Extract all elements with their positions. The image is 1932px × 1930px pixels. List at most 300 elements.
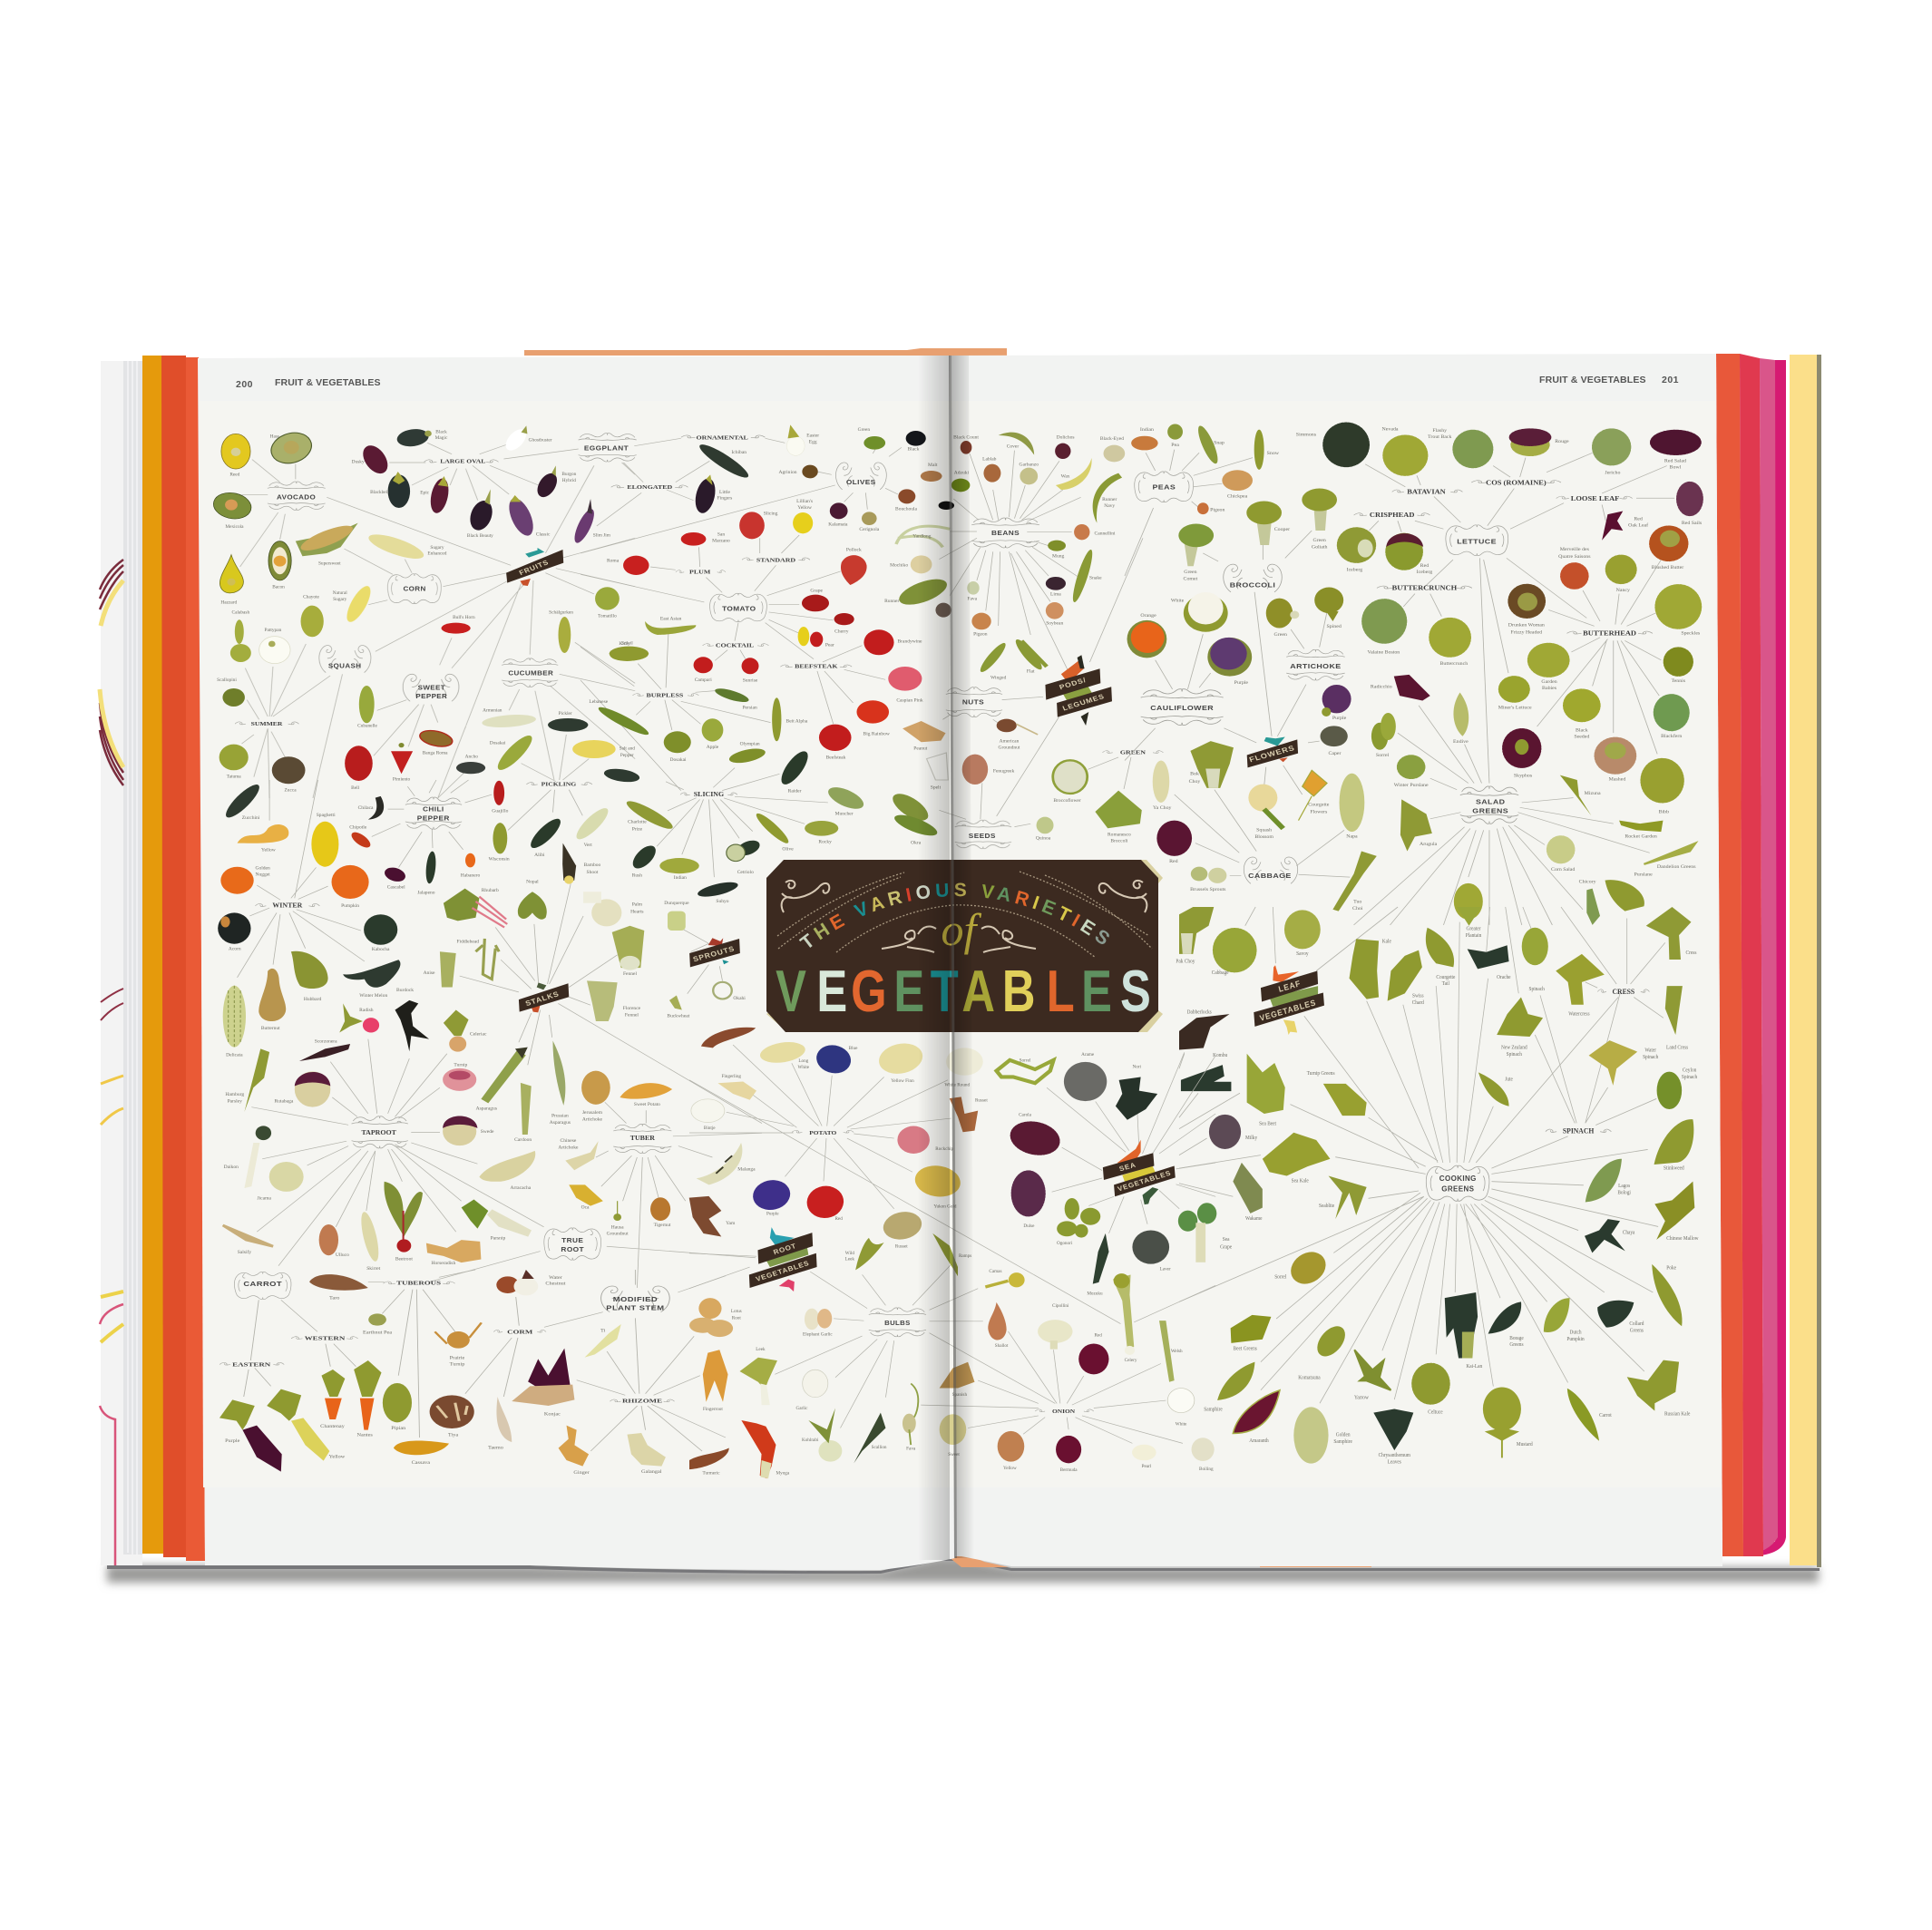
icon: Pimiento pepper: Pimiento — [393, 778, 411, 782]
icon: San Marzano tomato — [681, 532, 730, 546]
icon: Pigeon bean — [971, 613, 991, 637]
icon: Cetriolo cucumber — [727, 837, 762, 875]
icon: Lagos Bologi: Lagos — [1618, 1184, 1630, 1189]
hub: Western: WESTERN — [305, 1335, 346, 1341]
icon: Nantes carrot — [354, 1360, 382, 1438]
banner: Pods and Legumes — [1045, 655, 1112, 726]
icon: Golden Samphire: Samphire — [1333, 1439, 1352, 1445]
icon: Chantenay carrot: Chantenay — [320, 1425, 345, 1429]
icon: Malabar Spinach: Stinkweed — [1664, 1165, 1684, 1171]
icon: Prairie Turnip: Prairie — [450, 1356, 465, 1360]
icon: Napa cabbage — [1340, 774, 1364, 839]
icon: Land Cress — [1665, 986, 1688, 1051]
icon: Jicama — [257, 1162, 304, 1201]
icon: Taro: Taro — [329, 1296, 340, 1301]
icon: Fingerling potato: Fingerling — [721, 1075, 742, 1079]
hub: Taproot — [352, 1116, 408, 1148]
icon: Snap pea — [1195, 424, 1225, 465]
icon: Delicata squash — [223, 986, 246, 1058]
hub: Crisphead: CRISPHEAD — [1370, 512, 1415, 519]
hub: Nuts: NUTS — [962, 698, 984, 706]
icon: Sweet onion: Sweet — [948, 1453, 961, 1457]
icon: Lotus Root: Lotus — [731, 1310, 742, 1314]
icon: Buckwheat sprouts — [667, 995, 690, 1019]
chart region: top center, eggplant, olives, tomato, beans — [579, 424, 1164, 852]
icon: Russian Kale — [1627, 1360, 1691, 1418]
icon: Campari tomato: Campari — [695, 677, 712, 683]
icon: Tennis Ball lettuce — [1664, 648, 1692, 684]
hub: Plum — [676, 568, 726, 575]
icon: Ghost eggplant — [502, 425, 552, 453]
icon: Classic eggplant — [504, 495, 551, 539]
icon: Pear tomato: Pear — [825, 643, 834, 648]
icon: Bamboo Shoot: Bamboo — [584, 863, 601, 868]
icon: Cabbage: Cabbage — [1212, 970, 1229, 976]
icon: Chinese Artichoke: Artichoke — [558, 1145, 579, 1150]
hub: Loose leaf: LOOSE LEAF — [1571, 494, 1620, 502]
icon: Spinach leaf: Spinach — [1529, 987, 1545, 992]
icon: Cover green bean — [999, 433, 1034, 455]
icon: Swede — [443, 1116, 494, 1145]
icon: Mustard greens — [1483, 1387, 1533, 1457]
banner: Sprouts — [689, 938, 740, 967]
connector lines — [240, 443, 635, 798]
icon: Scallopini squash — [217, 678, 245, 707]
hub: Cocktail — [702, 641, 769, 648]
icon: Dabberlocks — [1179, 1010, 1229, 1050]
icon: Kale — [1350, 939, 1391, 999]
icon: Greater Plantain: Greater — [1467, 927, 1481, 932]
icon: Tatuma squash — [220, 745, 249, 779]
icon: Cooper broccoli — [1246, 501, 1290, 545]
icon: Greater Plantain — [1457, 907, 1481, 939]
icon: Big Rainbow tomato — [856, 700, 890, 736]
icon: Garbanzo bean: Garbanzo — [1020, 463, 1039, 467]
icon: Cardoon — [514, 1083, 532, 1143]
icon: Bok Choy: Bok — [1190, 772, 1199, 776]
icon: Yarrow — [1354, 1350, 1390, 1400]
hub: Cauliflower: CAULIFLOWER — [1150, 705, 1214, 712]
title word: of: of — [942, 904, 982, 955]
icon: Long White potato — [758, 1039, 810, 1070]
hub: True root: ROOT — [561, 1245, 584, 1253]
icon: Salsify — [223, 1225, 273, 1255]
icon: Purslane: Purslane — [1634, 872, 1653, 877]
icon: Tiger Nut — [650, 1197, 671, 1228]
icon: Sweet Potato — [620, 1083, 672, 1107]
icon: Spined artichoke: Spined — [1326, 624, 1342, 629]
icon: Celtuce — [1413, 1364, 1449, 1416]
icon: Hausa Groundnut — [607, 1201, 629, 1237]
icon: Borage Greens: Greens — [1509, 1342, 1524, 1348]
icon: Dabberlocks: Dabberlocks — [1187, 1010, 1212, 1016]
icon: Lillian's Yellow tomato: Yellow — [797, 505, 812, 511]
icon: Spelt seeds — [927, 753, 948, 790]
icon: Water Chestnut: Water — [549, 1276, 562, 1281]
icon: Nevada lettuce — [1382, 427, 1427, 475]
icon: Pea — [1167, 424, 1183, 448]
icon: Long White potato: Long — [798, 1059, 809, 1064]
icon: Lima bean: Lima — [1050, 592, 1062, 597]
page header, right: 201 — [1662, 375, 1679, 385]
icon: Red Iceberg lettuce: Red — [1420, 563, 1429, 569]
icon: Boston cucumber, slicing — [629, 842, 660, 878]
icon: Iceberg lettuce: Iceberg — [1347, 568, 1362, 572]
icon: Brandywine tomato — [864, 629, 922, 655]
icon: Green cauliflower: Broccoflower — [1053, 797, 1081, 804]
icon: Ghost eggplant: Ghostbuster — [529, 439, 552, 444]
icon: Acorn squash — [218, 912, 251, 951]
icon: Squash Blossom — [1248, 785, 1283, 840]
icon: Garbanzo bean — [1020, 463, 1039, 484]
hub: Green cauliflower — [1102, 748, 1164, 755]
right fore-edge colour bands — [1716, 354, 1821, 1567]
icon: Peanut — [903, 721, 946, 751]
icon: Chayote: Chayote — [303, 596, 320, 599]
icon: Bell pepper: Bell — [351, 786, 360, 791]
icon: Lillian's Yellow tomato — [793, 499, 813, 533]
hub: Slicing: SLICING — [694, 790, 724, 798]
inside cover with page block, left — [100, 361, 142, 1565]
icon: Banga Roma pepper — [418, 727, 454, 755]
icon: Yam — [689, 1196, 736, 1237]
hub: Standard: STANDARD — [756, 556, 795, 563]
icon: Welsh onion — [1159, 1321, 1183, 1382]
icon: Charlotte Prize cucumber: Prize — [632, 827, 643, 832]
icon: Sugary Enhanced corn: Enhanced — [427, 552, 447, 556]
hub: Summer: SUMMER — [251, 720, 283, 727]
icon: Blushed Butter lettuce: Blushed Butter — [1652, 565, 1683, 570]
icon: Rockchip potato: Rockchip — [935, 1147, 954, 1152]
icon: Red potato — [802, 1181, 849, 1223]
icon: Beetroot — [384, 1182, 423, 1262]
banner: Leaf Vegetables — [1254, 965, 1324, 1035]
icon: Classic eggplant: Classic — [536, 533, 551, 538]
icon: Lotus Root — [689, 1298, 742, 1337]
icon: Cress — [1646, 907, 1696, 960]
icon: Pear tomato — [798, 627, 834, 648]
icon: Green olive — [858, 427, 885, 450]
icon: Banga Roma pepper: Banga Roma — [423, 752, 448, 755]
icon: Red onion — [1078, 1334, 1108, 1374]
icon: Bull's Horn pepper: Bull's Horn — [453, 616, 475, 620]
icon: Armenian cucumber: Armenian — [483, 709, 503, 713]
icon: Red Oak Leaf lettuce: Oak Leaf — [1628, 522, 1648, 529]
icon: Ramps bulb: Ramps — [959, 1254, 971, 1259]
icon: Yellow carrot — [267, 1389, 345, 1461]
icon: Hamburg Parsley — [225, 1048, 269, 1112]
icon: Elephant Garlic — [803, 1309, 833, 1338]
icon: Red potato: Red — [834, 1217, 843, 1222]
icon: Mashed lettuce — [1595, 738, 1635, 782]
title word: Vegetables: S — [1120, 959, 1151, 1024]
hub: Bulbs — [869, 1308, 926, 1337]
icon: Russet potato: Russet — [895, 1245, 908, 1249]
icon: Fingerling potato — [717, 1075, 756, 1100]
icon: Spanish onion cluster — [940, 1362, 974, 1398]
icon: Rocket Garden: Rocket Garden — [1625, 834, 1657, 839]
icon: Runner bean: Runner — [884, 599, 900, 604]
icon: Nicoise olive: Malt — [928, 463, 938, 468]
icon: Nantes carrot: Nantes — [357, 1433, 373, 1438]
icon: Boston cucumber: Dosakai — [490, 742, 506, 746]
icon: Slim Jim eggplant — [571, 499, 610, 545]
icon: Milky seaweed — [1209, 1115, 1257, 1149]
icon: Bibb lettuce: Bibb — [1659, 810, 1669, 814]
icon: Celtuce: Celtuce — [1428, 1409, 1443, 1416]
icon: Natural Sugary corn: Sugary — [333, 598, 347, 602]
icon: Mozuku — [1087, 1233, 1108, 1296]
icon: Burdock — [395, 988, 429, 1051]
icon: Chaya — [1585, 1219, 1635, 1253]
icon: Swiss Chard: Chard — [1412, 1000, 1424, 1006]
left page — [198, 356, 955, 1570]
icon: Boiling onion: Boiling — [1199, 1467, 1214, 1472]
icon: Winged bean: Winged — [990, 676, 1007, 680]
hub: Olives: OLIVES — [846, 479, 876, 486]
icon: Squash Blossom: Blossom — [1254, 835, 1274, 840]
icon: Orange cauliflower: Orange — [1140, 613, 1156, 619]
icon: Golden Nugget squash: Nugget — [255, 872, 270, 878]
icon: Laver — [1132, 1230, 1171, 1272]
icon: Cassava — [394, 1441, 449, 1466]
icon: Sea Beet: Sea Beet — [1259, 1121, 1276, 1127]
hub: Chili pepper — [405, 797, 462, 829]
icon: Bermuda onion — [1056, 1436, 1081, 1473]
icon: Golden Samphire: Golden — [1336, 1433, 1351, 1438]
icon: Wild Leek — [845, 1238, 884, 1270]
icon: Cipollini: Cipollini — [1052, 1304, 1069, 1309]
icon: Vert cucumber — [572, 804, 612, 848]
icon: Sorrel — [1371, 713, 1396, 758]
icon: Wakame: Wakame — [1245, 1216, 1263, 1222]
icon: Bok Choy — [1189, 741, 1234, 788]
page header, left: 200 — [236, 379, 253, 390]
icon: Dolichos bean — [1055, 435, 1075, 459]
icon: Rutabaga — [274, 1071, 330, 1107]
icon: Bintje potato — [691, 1099, 725, 1131]
icon: Myoga — [741, 1420, 790, 1478]
icon: Chinese Artichoke: Chinese — [561, 1138, 577, 1144]
icon: Chicory — [1579, 880, 1600, 925]
icon: Winter Purslane: Winter Purslane — [1394, 783, 1429, 788]
icon: Pimiento pepper — [391, 743, 413, 782]
icon: Bacon avocado — [268, 541, 291, 590]
icon: Galangal: Galangal — [641, 1470, 662, 1475]
connector lines — [238, 780, 762, 1288]
icon: Quinoa — [1036, 817, 1054, 841]
hub: Squash — [319, 646, 371, 673]
icon: Scorzonera: Scorzonera — [315, 1038, 337, 1044]
banner: Root Vegetables: VEGETABLES — [755, 1259, 811, 1283]
icon: Flambe lettuce: Drunken Woman — [1508, 623, 1545, 629]
hub: Tomato: TOMATO — [722, 605, 756, 612]
hub: Ornamental — [681, 434, 766, 441]
connector lines — [689, 1045, 1215, 1443]
icon: Romanesco — [1095, 791, 1142, 843]
icon: Nancy lettuce — [1606, 556, 1635, 593]
icon: Laver: Laver — [1160, 1268, 1171, 1272]
hub: Eggplant — [579, 434, 637, 462]
icon: Hausa Groundnut: Hausa — [611, 1225, 624, 1230]
icon: San Marzano tomato: Marzano — [712, 539, 730, 543]
icon: Galangal — [627, 1433, 666, 1475]
icon: Okra: Okra — [911, 841, 922, 845]
icon: Rocket Garden — [1619, 821, 1663, 839]
icon: Turmeric — [689, 1448, 729, 1476]
icon: Fenugreek seeds: Fenugreek — [993, 769, 1015, 774]
icon: Tiya corm: Tiya — [448, 1433, 459, 1438]
hub: Loose leaf — [1556, 494, 1633, 502]
icon: Mung bean — [1048, 541, 1066, 559]
hub: Spinach — [1546, 1126, 1611, 1136]
hub: Salad greens: GREENS — [1472, 807, 1508, 814]
icon: Garlic — [795, 1370, 828, 1411]
icon: White cauliflower: White — [1171, 599, 1185, 603]
icon: Simmons lettuce — [1296, 424, 1369, 466]
hub: Beefsteak — [780, 662, 852, 669]
icon: Chrysanthemum Leaves: Leaves — [1388, 1459, 1401, 1466]
icon: Green artichoke — [1266, 599, 1299, 638]
icon: Arame: Arame — [1081, 1053, 1095, 1058]
icon: Dunquerque sprouts — [664, 901, 689, 931]
chart paper background — [200, 401, 1721, 1487]
icon: New Zealand Spinach: Spinach — [1507, 1052, 1522, 1058]
hub: Cos (Romaine): COS (ROMAINE) — [1486, 479, 1547, 486]
icon: Tennis Ball lettuce: Tennis — [1672, 678, 1685, 684]
icon: Cubanelle pepper: Cubanelle — [357, 725, 378, 728]
icon: Salsify: Salsify — [238, 1249, 251, 1255]
icon: Fava bean — [967, 581, 980, 601]
icon: Natural Sugary corn — [333, 583, 376, 625]
icon: Daikon: Daikon — [224, 1165, 239, 1170]
icon: Runner Navy bean — [1093, 473, 1122, 523]
banner: Stalks: STALKS — [524, 990, 561, 1008]
icon: Cipollini — [1038, 1304, 1073, 1350]
icon: White onion — [1167, 1389, 1195, 1427]
icon: Raider cucumber — [776, 748, 813, 794]
icon: Poke — [1652, 1264, 1682, 1326]
icon: Kabocha squash — [364, 914, 397, 952]
icon: Sorrel — [1274, 1246, 1331, 1290]
icon: Green cauliflower — [1053, 760, 1088, 804]
icon: Purple carrot — [220, 1399, 282, 1472]
icon: Buckwheat sprouts: Buckwheat — [667, 1014, 690, 1019]
icon: Scallion: Scallion — [872, 1446, 887, 1450]
icon: Cranberry bean — [935, 603, 951, 618]
hub: Spinach: SPINACH — [1563, 1126, 1595, 1136]
hub: Cucumber — [502, 658, 558, 687]
icon: Natural Sugary corn: Natural — [333, 591, 347, 596]
icon: Mexicola avocado: Mexicola — [225, 525, 244, 530]
icon: Alfalfa sprouts: Okahi — [733, 996, 746, 1001]
icon: Sorrel, leaf — [1454, 883, 1483, 920]
banner: Sea Vegetables: SEA — [1118, 1161, 1137, 1173]
icon: American Groundnut: Groundnut — [999, 746, 1020, 750]
hub: Potato: POTATO — [809, 1129, 837, 1136]
hub: Chili pepper: PEPPER — [417, 814, 450, 822]
icon: Slim Jim eggplant: Slim Jim — [593, 534, 610, 539]
hub: Butterhead — [1566, 629, 1653, 637]
icon: Alibi cucumber: Alibi — [534, 853, 545, 858]
icon: Fava onion sprout: Fava — [906, 1448, 916, 1451]
icon: Kale: Kale — [1382, 939, 1391, 944]
icon: Tuo Choi — [1332, 852, 1377, 911]
icon: Anise — [424, 951, 456, 988]
icon: Courgette Tail: Courgette — [1436, 975, 1456, 980]
icon: Purple potato: Purple — [766, 1213, 779, 1216]
icon: Jalapeno chili — [417, 851, 437, 896]
icon: Chicory: Chicory — [1579, 880, 1596, 884]
icon: Prussian Asparagus — [550, 1040, 571, 1126]
chart region: top left, avocado to cucumber — [210, 425, 644, 798]
banner: Sea Vegetables — [1103, 1140, 1176, 1204]
icon: Radicchio — [1371, 675, 1430, 700]
chart region: bottom left, carrots, tuberous roots and rhizomes — [220, 1270, 726, 1476]
icon: Prussian Asparagus: Asparagus — [550, 1120, 571, 1126]
icon: Flat bean — [1012, 637, 1047, 674]
icon: Suhyo cucumber: Kirby — [619, 642, 630, 647]
icon: Romanesco: Broccoli — [1110, 839, 1128, 843]
icon: Elephant Garlic: Elephant Garlic — [803, 1333, 833, 1338]
icon: Kombu: Kombu — [1213, 1053, 1227, 1058]
icon: Jute: Jute — [1505, 1077, 1513, 1083]
hub: Nuts — [946, 687, 1002, 717]
icon: Pickling cucumber — [548, 712, 588, 732]
icon: Camas — [985, 1270, 1025, 1287]
title word: Vegetables: V — [776, 959, 806, 1024]
icon: Burgon Hybrid eggplant — [533, 465, 577, 500]
icon: Nori — [1116, 1065, 1157, 1120]
icon: Epic eggplant: Epic — [420, 492, 430, 496]
icon: Red Oak Leaf lettuce — [1602, 512, 1648, 541]
icon: Arracacha: Arracacha — [511, 1185, 532, 1191]
icon: Yellow Crookneck — [238, 824, 288, 853]
icon: Purslane — [1605, 872, 1653, 911]
icon: Ceylon Spinach: Ceylon — [1683, 1067, 1696, 1074]
icon: Anise: Anise — [424, 970, 435, 976]
hub: Corn — [387, 574, 441, 604]
hub: Cabbage — [1244, 857, 1298, 883]
icon: Bull's Horn pepper — [442, 616, 475, 634]
banner: Fruits: FRUITS — [518, 559, 551, 577]
icon: Arugula — [1400, 799, 1438, 852]
icon: Pattypan squash: Pattypan — [265, 629, 282, 633]
icon: Palm Hearts: Palm — [632, 902, 643, 907]
icon: Mexicola avocado — [210, 489, 255, 530]
icon: Yellow Finn potato: Yellow Finn — [891, 1079, 914, 1084]
icon: Wild Leek: Leek — [845, 1258, 855, 1262]
icon: Bell pepper — [345, 746, 373, 791]
icon: Sea Beet — [1247, 1054, 1285, 1127]
hub: Peas — [1135, 472, 1194, 502]
icon: Yarrow: Yarrow — [1354, 1395, 1369, 1400]
icon: Courgette Tail: Tail — [1442, 981, 1449, 987]
icon: Yukon Gold potato: Yukon Gold — [933, 1205, 957, 1209]
icon: Persian cucumber: Persian — [742, 706, 757, 710]
icon: Black Magic eggplant — [395, 427, 448, 449]
hub: Cooking greens: GREENS — [1441, 1184, 1474, 1194]
icon: Raider cucumber: Raider — [788, 789, 802, 794]
icon: Ichiban eggplant — [696, 441, 753, 482]
icon: Ceylon Spinach — [1657, 1067, 1697, 1109]
hub: Avocado — [268, 482, 326, 510]
icon: Red Salad Bowl lettuce: Bowl — [1670, 465, 1682, 470]
icon: Chayote — [301, 596, 324, 637]
icon: Celeriac: Celeriac — [470, 1032, 487, 1037]
icon: Green Comet broccoli: Comet — [1184, 577, 1198, 581]
icon: Courgette Flowers: Courgette — [1308, 803, 1330, 807]
